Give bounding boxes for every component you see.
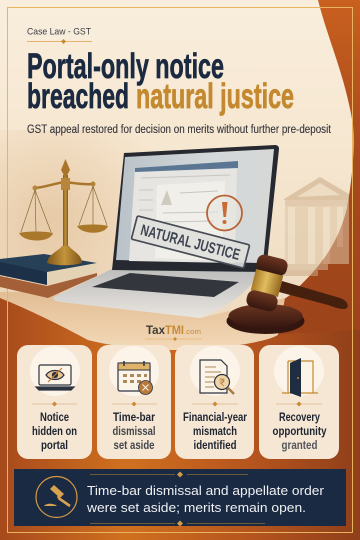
illustration: courthouse [272,177,349,276]
icon: laptop with crossed eye [36,365,74,390]
background: warm left glow [0,130,170,310]
card: notice hidden on portal: Notice [40,410,69,424]
banner: conclusion [14,469,346,526]
laptop keyboard [92,273,239,297]
laptop screen bezel [112,145,279,272]
background: rust curtain curve [226,0,360,345]
banner text: were set aside; merits remain open. [86,500,306,515]
stamp: natural justice [131,216,250,268]
card: notice hidden on portal: hidden on [32,424,77,438]
card: time-bar dismissal set aside: dismissal [112,424,156,438]
card: recovery opportunity granted: granted [282,438,318,452]
card: financial-year mismatch identified [175,345,254,459]
illustration: balance scales [19,159,108,265]
kicker: case law label [27,26,92,44]
laptop deck [53,269,266,318]
logo: TaxTMI.com: TMI [165,323,184,337]
logo: TaxTMI.com: .com [184,329,201,336]
illustration: gavel [226,253,348,334]
card: time-bar dismissal set aside [97,345,171,459]
logo: TaxTMI.com: Tax [146,323,165,337]
icon: gavel in circle [36,476,77,518]
logo: TaxTMI.com [145,323,202,341]
browser window [129,161,238,263]
background: lower orange panel [0,298,360,540]
laptop screen display [116,149,274,263]
icon: open door [282,358,318,397]
stamp: natural justice: NATURAL JUSTICE [139,222,242,264]
title [27,47,294,116]
card: time-bar dismissal set aside: set aside [114,438,155,452]
card: notice hidden on portal [17,345,92,459]
illustration: laptop [53,145,279,318]
icon: calendar with cross [118,361,152,394]
card: notice hidden on portal: portal [41,438,68,452]
alert icon [207,196,242,230]
card: financial-year mismatch identified: identified [194,438,236,452]
background: desk surface [0,292,285,350]
card: recovery opportunity granted [259,345,339,459]
card: time-bar dismissal set aside: Time-bar [113,410,155,424]
kicker: case law label: Case Law - GST [27,26,91,38]
card: financial-year mismatch identified: mismatch [193,424,237,438]
card: recovery opportunity granted: Recovery [279,410,320,424]
icon: document with magnifier [200,360,234,394]
banner text: Time-bar dismissal and appellate order [87,483,325,498]
card: financial-year mismatch identified: Financial-year [183,410,247,424]
card: recovery opportunity granted: opportunity [272,424,327,438]
title: Portal-only notice [27,47,224,86]
illustration: books [0,254,97,298]
title: breached [27,77,129,116]
